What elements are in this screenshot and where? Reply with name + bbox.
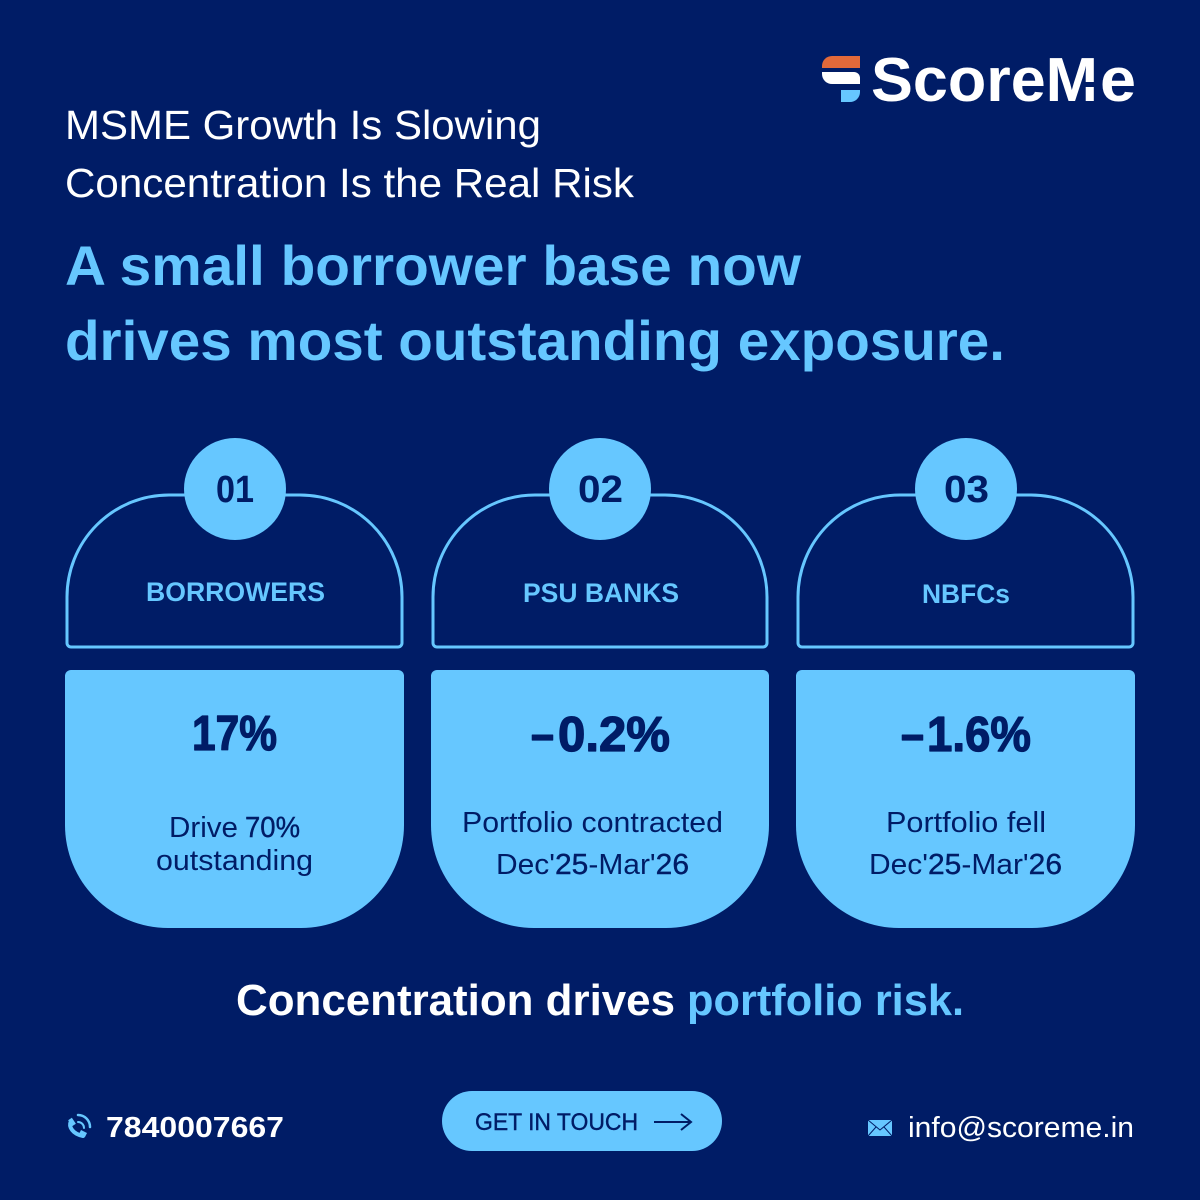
number badge: 01: 01 <box>216 469 254 511</box>
card: PSU banks stat: – <box>531 708 554 762</box>
takeaway line: portfolio risk. <box>687 976 964 1025</box>
title <box>65 102 635 206</box>
label: borrowers: BORROWERS <box>146 577 325 607</box>
number badge: 03: 03 <box>944 469 989 511</box>
card: PSU banks stat: Portfolio contracted <box>462 807 723 839</box>
arch outline: PSU banks <box>433 495 767 647</box>
panel: borrowers <box>65 438 404 928</box>
arch outline: borrowers <box>67 495 402 647</box>
card: NBFCs stat: Dec'25-Mar'26 <box>869 849 1062 881</box>
card: NBFCs stat: Portfolio fell <box>886 807 1046 839</box>
card: borrowers stat <box>65 670 404 928</box>
takeaway line <box>236 976 964 1025</box>
logo: ScoreMe: e <box>1100 46 1136 115</box>
arrow <box>654 1114 691 1130</box>
card: borrowers stat: 70% <box>245 812 300 844</box>
panel: NBFCs <box>796 438 1135 928</box>
card: PSU banks stat: 0.2% <box>558 708 670 762</box>
card: borrowers stat: outstanding <box>156 845 313 877</box>
panel: PSU banks <box>431 438 769 928</box>
card: NBFCs stat: 1.6% <box>927 708 1031 762</box>
label: PSU banks: PSU BANKS <box>523 578 679 608</box>
arch outline: NBFCs <box>798 495 1133 647</box>
card: borrowers stat: 17% <box>192 707 277 761</box>
title: Concentration Is the Real Risk <box>65 160 635 206</box>
logo: ScoreMe: ScoreM <box>871 46 1098 115</box>
number badge: 03 <box>915 438 1017 540</box>
number badge: 02 <box>549 438 651 540</box>
heading <box>65 234 1005 372</box>
card: NBFCs stat: – <box>901 708 924 762</box>
button: get in touch <box>442 1091 722 1151</box>
card: PSU banks stat <box>431 670 769 928</box>
number badge: 02: 02 <box>578 469 623 511</box>
heading: drives most outstanding exposure. <box>65 309 1005 372</box>
phone number: 7840007667 <box>106 1112 284 1144</box>
takeaway line: Concentration drives <box>236 976 675 1025</box>
heading: A small borrower base now <box>65 234 801 297</box>
button: get in touch: GET IN TOUCH <box>475 1109 638 1136</box>
email address: info@scoreme.in <box>908 1112 1134 1144</box>
icon: envelope <box>868 1120 892 1136</box>
label: NBFCs: NBFCs <box>922 579 1010 609</box>
card: PSU banks stat: Dec'25-Mar'26 <box>496 849 689 881</box>
number badge: 01 <box>184 438 286 540</box>
title: MSME Growth Is Slowing <box>65 102 541 148</box>
card: NBFCs stat <box>796 670 1135 928</box>
icon: phone <box>70 1115 90 1136</box>
card: borrowers stat: Drive <box>169 812 238 844</box>
